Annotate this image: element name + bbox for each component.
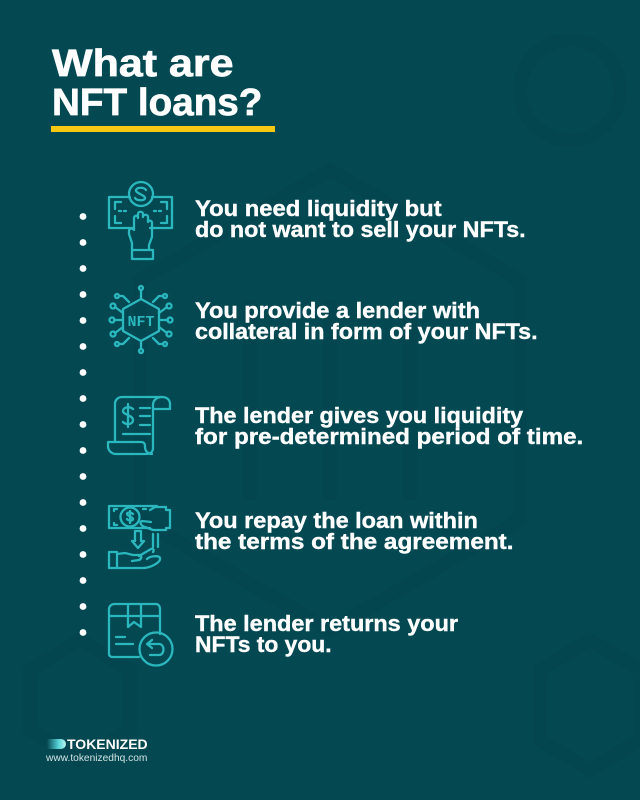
footer logo — [46, 736, 148, 764]
logo mark — [47, 739, 66, 749]
title: NFT loans? — [52, 82, 262, 124]
step 4 text — [195, 508, 514, 554]
step 3 text: for pre-determined period of time. — [195, 424, 583, 449]
step 2 text: You provide a lender with — [195, 298, 480, 323]
step 4 text: You repay the loan within — [195, 508, 478, 533]
step 1 text: do not want to sell your NFTs. — [195, 217, 526, 242]
step 2 text: collateral in form of your NFTs. — [195, 319, 538, 344]
step 1 text: You need liquidity but — [195, 196, 442, 221]
step 4 text: the terms of the agreement. — [195, 529, 514, 554]
step 5 text: NFTs to you. — [195, 632, 332, 657]
step 3 text: The lender gives you liquidity — [195, 403, 523, 428]
title — [52, 43, 262, 124]
icon: NFT hexagon: NFT — [127, 314, 155, 331]
step 2 text — [195, 298, 538, 344]
website url: www.tokenizedhq.com — [46, 753, 147, 764]
step 5 text: The lender returns your — [195, 611, 458, 636]
step 5 text — [195, 611, 458, 657]
title underline — [51, 126, 275, 132]
step 3 text — [195, 403, 583, 449]
logo wordmark: TOKENIZED — [67, 736, 148, 752]
step 1 text — [195, 196, 526, 242]
title: What are — [52, 43, 234, 85]
